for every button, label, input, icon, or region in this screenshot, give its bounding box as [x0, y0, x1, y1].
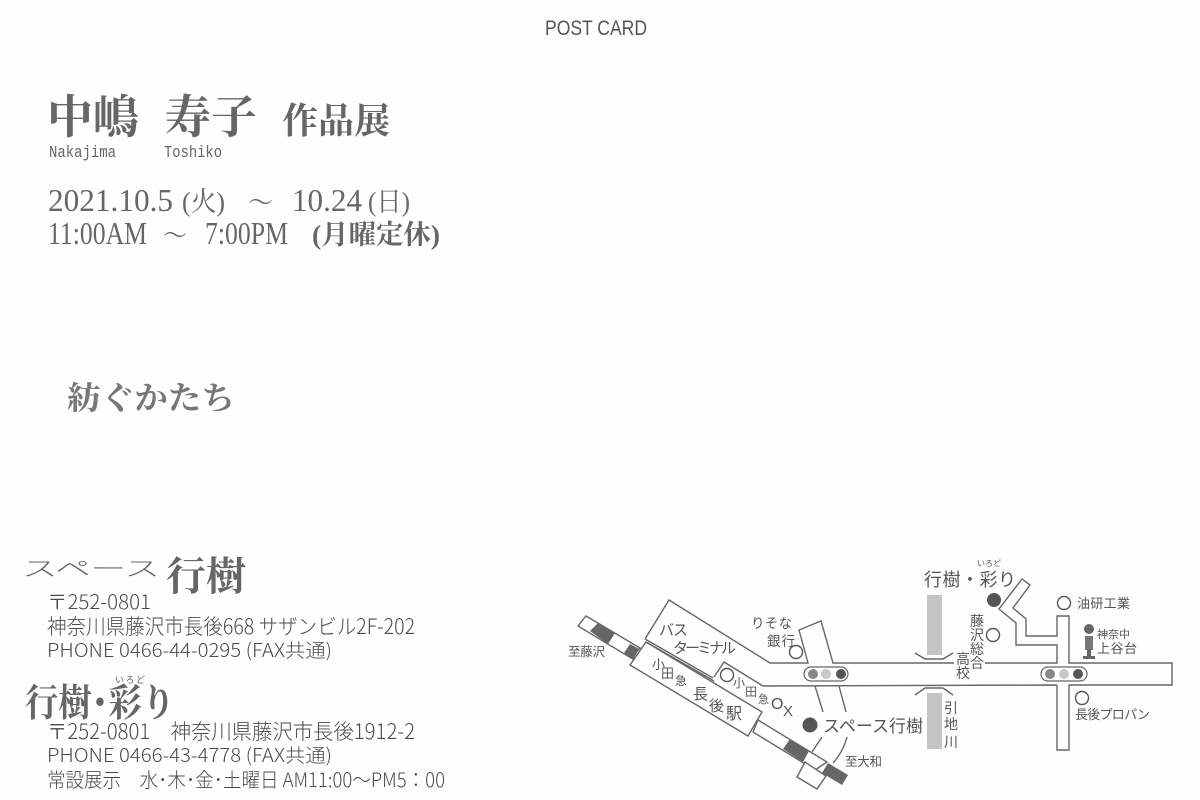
artist name in roman letters [49, 144, 222, 163]
map label: yuken kogyo: 油研工業 [1077, 596, 1130, 611]
map label: fujisawa sogo high school: 合 [970, 655, 984, 671]
access map [568, 559, 1172, 789]
exhibition subtitle: 紡ぐかたち [67, 380, 235, 416]
map label: resona bank [751, 616, 795, 649]
exhibition dates and hours: ～ [248, 190, 273, 217]
gallery address block: 神奈川県藤沢市長後668 サザンビル2F-202 [47, 611, 415, 641]
map label: odakyu nagago station: 駅 [726, 706, 742, 723]
heading: post card: POST CARD [545, 17, 647, 40]
title: artist name and exhibition [47, 92, 390, 143]
map label: kanachu kamiyadai: 神奈中 [1097, 627, 1130, 641]
map label: nagago propane: 長後プロパン [1075, 707, 1150, 722]
map label: odakyu nagago station: 田 [661, 666, 674, 681]
map label: odakyu ox: 田 [745, 685, 757, 699]
gallery address block: 〒252-0801 [47, 586, 151, 615]
map label: fujisawa sogo high school [956, 613, 984, 681]
map label: odakyu ox: 急 [758, 692, 769, 706]
gallery address block: PHONE 0466-44-0295 (FAX共通) [47, 636, 332, 663]
bus stop icon [1083, 624, 1095, 659]
map label: resona bank: 銀行 [767, 634, 795, 649]
map label: odakyu ox: X [783, 703, 793, 720]
map label: bus terminal: ターミナル [673, 640, 736, 657]
map label: odakyu ox: O [771, 696, 783, 713]
map label: to yamato: 至大和 [845, 755, 882, 769]
exhibition dates and hours [48, 182, 440, 251]
map label: namiki irodori: 行樹・彩り [924, 570, 1016, 590]
map label: fujisawa sogo high school: 沢 [970, 627, 984, 643]
exhibition dates and hours: (火) [182, 187, 225, 217]
map label: namiki irodori [924, 559, 1016, 590]
gallery logo: namiki irodori: いろど [115, 675, 145, 685]
artist name in roman letters: Toshiko [164, 144, 222, 163]
landmark circles [720, 596, 1088, 704]
map label: resona bank: りそな [751, 616, 792, 631]
second gallery address block: PHONE 0466-43-4778 (FAX共通) [47, 741, 332, 768]
gallery address block [47, 586, 415, 663]
gallery logo: namiki irodori: 行樹･彩り [25, 683, 175, 725]
map label: odakyu nagago station: 小 [652, 657, 665, 672]
map label: fujisawa sogo high school: 総 [970, 641, 984, 657]
map label: kanachu kamiyadai [1097, 627, 1137, 656]
title: artist name and exhibition: 作品展 [282, 101, 390, 141]
map label: odakyu ox: 小 [733, 676, 745, 690]
gallery location dots [802, 593, 1001, 732]
map label: bus terminal [659, 622, 736, 657]
exhibition dates and hours: 7:00PM [205, 215, 288, 251]
bus terminal and roads [645, 579, 1172, 763]
exhibition dates and hours: ～ [163, 223, 187, 250]
map label: kanachu kamiyadai: 上谷台 [1097, 641, 1137, 656]
map label: hikiji river: 地 [944, 716, 958, 732]
exhibition dates and hours: 10.24 [292, 182, 362, 218]
exhibition dates and hours: 2021.10.5 [48, 182, 173, 218]
map label: odakyu ox [733, 676, 793, 720]
gallery logo: space namiki: スペース [22, 558, 160, 581]
exhibition dates and hours: (日) [368, 187, 410, 217]
traffic signal right [1041, 667, 1087, 681]
gallery logo: space namiki: 行樹 [166, 554, 246, 599]
map label: odakyu nagago station: 後 [709, 698, 724, 715]
river and bridge [915, 595, 953, 749]
exhibition dates and hours: (月曜定休) [312, 220, 440, 250]
second gallery address block [47, 716, 445, 793]
second gallery address block: 常設展示 水･木･金･土曜日 AM11:00～PM5：00 [47, 764, 445, 793]
second gallery address block: 〒252-0801 神奈川県藤沢市長後1912-2 [47, 716, 415, 746]
map label: hikiji river: 引 [944, 700, 958, 716]
map label: fujisawa sogo high school: 校 [956, 665, 970, 681]
station building [630, 642, 762, 736]
map label: fujisawa sogo high school: 藤 [970, 613, 984, 629]
map label: hikiji river: 川 [944, 734, 958, 750]
gallery logo: space namiki [22, 554, 246, 599]
title: artist name and exhibition: 中嶋 [47, 92, 139, 143]
map label: space namiki: スペース行樹 [823, 717, 923, 736]
map label: hikiji river [944, 700, 958, 750]
exhibition dates and hours: 11:00AM [48, 215, 147, 251]
railway line [578, 616, 848, 789]
map label: fujisawa sogo high school: 高 [956, 651, 970, 667]
map label: namiki irodori: いろど [977, 559, 1001, 568]
map label: to fujisawa: 至藤沢 [568, 645, 605, 659]
map label: odakyu nagago station [652, 657, 742, 723]
map label: odakyu nagago station: 急 [675, 673, 687, 688]
traffic signal left [804, 667, 848, 681]
artist name in roman letters: Nakajima [49, 144, 116, 163]
title: artist name and exhibition: 寿子 [165, 92, 257, 143]
map label: odakyu nagago station: 長 [693, 686, 708, 703]
map label: bus terminal: バス [659, 622, 688, 639]
